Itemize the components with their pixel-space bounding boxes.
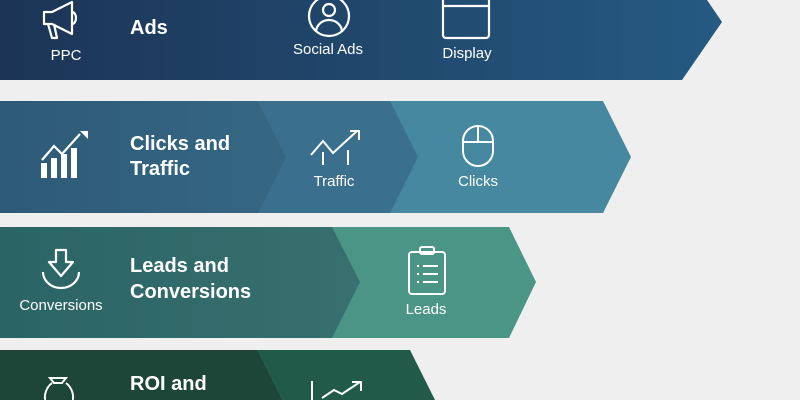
label: Leads: Leads	[406, 301, 446, 318]
label: Conversions: Conversions	[19, 297, 103, 314]
label: Social Ads: Social Ads	[293, 41, 363, 58]
label: Clicks: Clicks	[458, 173, 498, 190]
icon: growth chart	[312, 381, 361, 400]
label: Display: Display	[442, 45, 492, 62]
icon: conversion arrow	[43, 250, 79, 288]
icon: display window	[443, 0, 489, 38]
icon: social user	[309, 0, 349, 36]
panel: ads row	[0, 0, 722, 80]
icon: growth chart	[41, 131, 88, 178]
icon: clipboard	[409, 247, 445, 294]
panel: leads and conversions row	[0, 227, 536, 338]
heading: Clicks and Traffic: Clicks and	[130, 133, 230, 155]
icon: mouse	[463, 126, 493, 166]
heading: Clicks and Traffic: Traffic	[130, 158, 190, 180]
label: Traffic: Traffic	[314, 173, 355, 190]
icon: money bag	[45, 378, 73, 400]
icon: traffic trend	[311, 131, 359, 165]
heading: Ads: Ads	[130, 17, 168, 39]
heading: Leads and Conversions: Conversions	[130, 281, 251, 303]
heading: Leads and Conversions: Leads and	[130, 255, 229, 277]
label: PPC: PPC	[51, 47, 82, 64]
panel: ROI row	[0, 350, 435, 400]
heading: ROI and: ROI and	[130, 373, 207, 395]
panel: clicks and traffic row	[0, 101, 631, 213]
icon: megaphone	[44, 2, 76, 38]
